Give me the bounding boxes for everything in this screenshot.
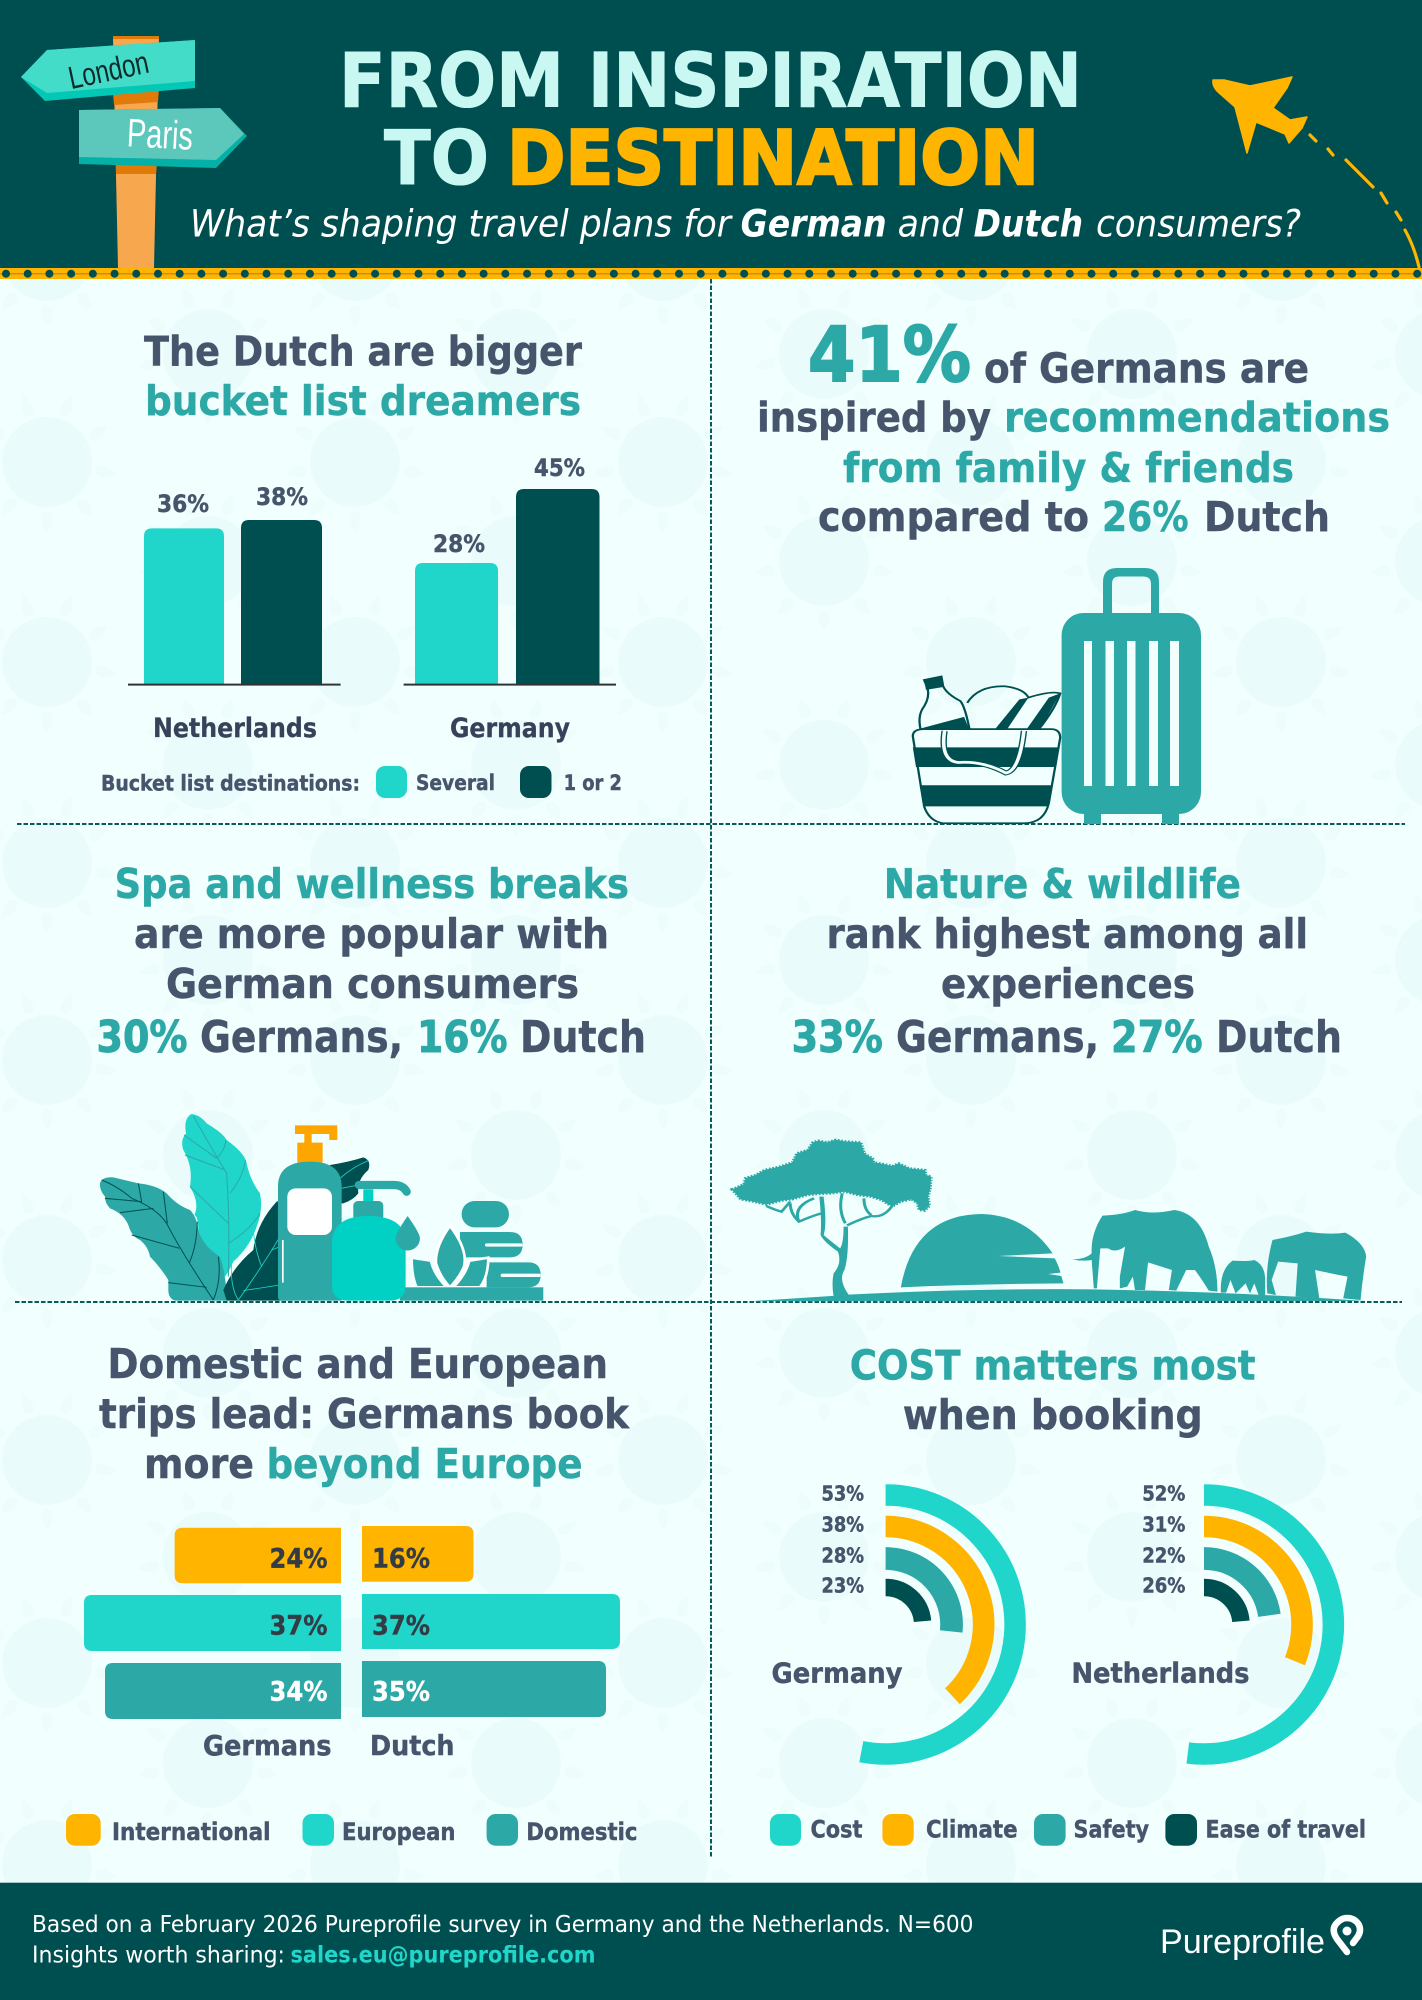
heading — [99, 1340, 631, 1488]
heading: bucket list dreamers — [145, 377, 581, 425]
header panel — [0, 0, 1422, 279]
icon: spa products and leaves — [100, 1114, 543, 1301]
heading — [757, 310, 1390, 541]
diverging bar chart: 35% — [372, 1676, 430, 1708]
heading: trips lead: Germans book — [99, 1390, 631, 1438]
logo: Pureprofile: Pureprofile — [1160, 1923, 1325, 1961]
footer text: Based on a February 2026 Pureprofile survey in Germany and the Netherlands. N=600 — [32, 1912, 974, 1938]
heading: experiences — [941, 960, 1195, 1008]
heading: Spa and wellness breaks — [115, 860, 629, 908]
heading — [792, 860, 1342, 1063]
icon: signpost: London — [65, 44, 152, 96]
heading: Domestic and European — [108, 1340, 608, 1388]
heading: Germans, — [896, 1012, 1099, 1063]
legend: Several — [416, 771, 495, 795]
heading: Dutch — [520, 1012, 646, 1063]
footer text: Insights worth sharing: — [32, 1943, 285, 1969]
subtitle: Dutch — [974, 203, 1083, 246]
radial chart: Netherlands: Netherlands — [1072, 1657, 1250, 1690]
heading: Nature & wildlife — [884, 860, 1241, 908]
diverging bar chart: 37% — [270, 1610, 328, 1642]
legend: Cost — [810, 1816, 862, 1844]
legend — [101, 766, 622, 798]
heading: 33% — [792, 1012, 883, 1063]
bar chart: Netherlands — [153, 713, 317, 744]
icon: plane with dashed trail — [1213, 77, 1419, 267]
panel: cost matters most — [770, 1342, 1366, 1846]
radial chart: Germany: Germany — [772, 1657, 902, 1690]
panel: spa and wellness — [96, 860, 646, 1301]
heading: rank highest among all — [826, 910, 1308, 958]
title: TO — [384, 114, 489, 202]
heading: 26% — [1102, 493, 1189, 541]
legend: International — [112, 1818, 270, 1846]
diverging bar chart: 34% — [270, 1676, 328, 1708]
diverging bar chart: Dutch — [370, 1729, 454, 1762]
heading — [850, 1342, 1256, 1439]
radial chart: Netherlands — [1072, 1482, 1333, 1754]
radial chart: Netherlands: 31% — [1142, 1513, 1185, 1537]
title: FROM INSPIRATION — [339, 37, 1082, 125]
title — [339, 37, 1082, 202]
heading: recommendations — [1004, 394, 1390, 442]
legend: Ease of travel — [1206, 1816, 1366, 1844]
panel: domestic and european trips — [66, 1340, 637, 1846]
icon: beach bag — [913, 677, 1060, 823]
icon: signpost: Paris — [126, 111, 194, 159]
heading: COST matters most — [850, 1342, 1256, 1390]
icon: signpost — [21, 36, 247, 268]
heading: Dutch — [1204, 493, 1330, 541]
heading: 30% — [96, 1012, 188, 1063]
heading: The Dutch are bigger — [144, 328, 583, 376]
heading: when booking — [903, 1391, 1203, 1439]
legend: Climate — [926, 1816, 1018, 1844]
subtitle: German — [741, 203, 887, 246]
legend: European — [342, 1818, 456, 1846]
radial chart: Germany: 38% — [822, 1513, 864, 1537]
radial chart: Germany: 28% — [822, 1544, 864, 1568]
heading: German consumers — [166, 960, 579, 1008]
icon: savanna with tree, sun and elephants — [732, 1140, 1366, 1301]
heading: compared to — [818, 493, 1089, 541]
heading: Dutch — [1216, 1012, 1342, 1063]
subtitle — [190, 203, 1301, 246]
icon: suitcase — [1062, 568, 1201, 824]
title: DESTINATION — [507, 114, 1039, 202]
legend: Safety — [1074, 1816, 1149, 1844]
footer panel — [0, 1883, 1422, 2000]
bar chart: 28% — [433, 530, 485, 558]
heading: from family & friends — [843, 444, 1294, 492]
legend: Domestic — [526, 1818, 637, 1846]
heading: beyond Europe — [266, 1440, 582, 1488]
bar chart — [128, 454, 616, 744]
subtitle: consumers? — [1096, 203, 1301, 246]
diverging bar chart — [84, 1526, 620, 1762]
bar chart: 36% — [157, 490, 209, 518]
subtitle: What’s shaping travel plans for — [190, 203, 734, 246]
radial chart: Netherlands: 26% — [1142, 1574, 1185, 1598]
bar chart: Germany — [450, 713, 570, 744]
heading: inspired by — [757, 394, 991, 442]
heading: are more popular with — [134, 910, 609, 958]
heading: 16% — [417, 1012, 508, 1063]
legend — [770, 1814, 1366, 1846]
legend: 1 or 2 — [564, 771, 622, 795]
ribbon — [0, 268, 1422, 279]
panel: recommendations — [757, 310, 1390, 824]
heading: more — [144, 1440, 254, 1488]
radial chart: Germany: 53% — [822, 1482, 864, 1506]
diverging bar chart: Germans — [203, 1729, 332, 1762]
radial chart: Germany — [772, 1482, 1015, 1754]
radial chart: Germany: 23% — [822, 1574, 864, 1598]
diverging bar chart: 24% — [270, 1544, 328, 1574]
diverging bar chart: 37% — [372, 1610, 430, 1642]
legend: Bucket list destinations: — [101, 772, 360, 796]
heading — [144, 328, 583, 425]
subtitle: and — [898, 203, 964, 246]
panel: nature and wildlife — [732, 860, 1366, 1301]
footer text: sales.eu@pureprofile.com — [290, 1943, 596, 1969]
radial chart: Netherlands: 52% — [1142, 1482, 1185, 1506]
heading: of Germans are — [984, 344, 1309, 392]
footer text — [32, 1912, 974, 1969]
panel: bucket list dreamers — [101, 328, 622, 798]
heading — [96, 860, 646, 1063]
bar chart: 45% — [534, 454, 585, 482]
heading: Germans, — [200, 1012, 403, 1063]
legend — [66, 1814, 637, 1846]
radial chart: Netherlands: 22% — [1142, 1544, 1185, 1568]
heading: 27% — [1111, 1012, 1202, 1063]
bar chart: 38% — [256, 483, 308, 511]
heading: 41% — [808, 310, 971, 399]
diverging bar chart: 16% — [372, 1544, 430, 1574]
